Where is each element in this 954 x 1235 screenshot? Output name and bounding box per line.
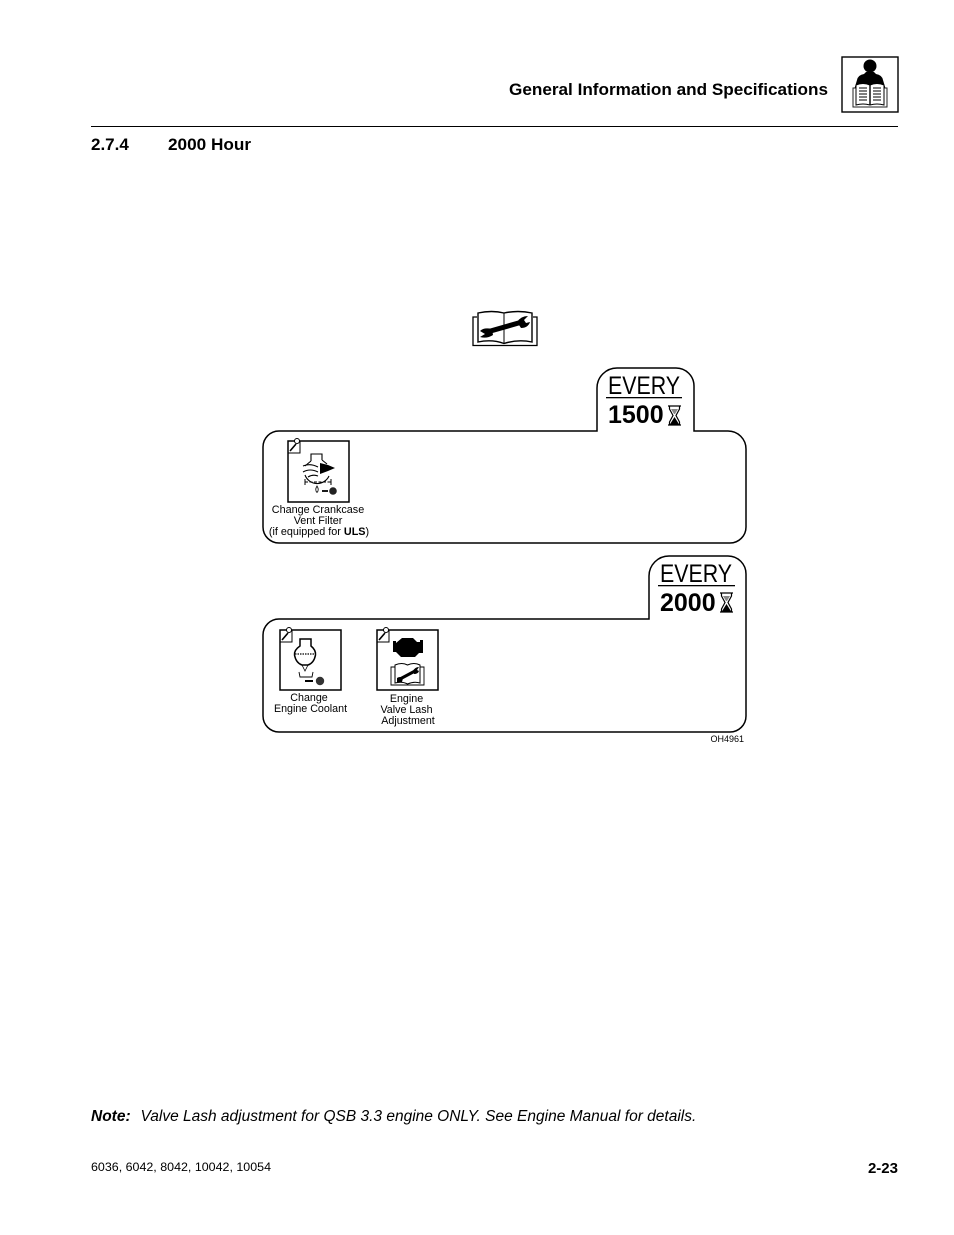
task caption: Change [290, 692, 328, 704]
task: change crankcase vent filter [269, 438, 369, 538]
section heading: 2.7.4 [91, 135, 129, 154]
tab label: 1500: 1500 [608, 401, 664, 429]
icon: coolant drain [280, 628, 341, 690]
task caption: Adjustment [381, 715, 435, 727]
icon: hourglass [720, 593, 733, 612]
figure reference: OH4961 [710, 734, 744, 744]
footer model numbers: 6036, 6042, 8042, 10042, 10054 [91, 1160, 271, 1174]
icon: engine and manual [377, 628, 438, 690]
page number: 2-23 [868, 1160, 898, 1177]
tab rule [606, 397, 682, 398]
icon: service manual with wrench [473, 312, 537, 346]
note: Note: [91, 1108, 131, 1125]
icon: person reading manual [842, 57, 898, 112]
header rule [91, 126, 898, 127]
task caption: Engine [390, 693, 423, 705]
section heading: 2000 Hour [168, 135, 251, 154]
section heading [91, 135, 251, 154]
tab label: every: EVERY [660, 560, 732, 588]
panel outline with tab [263, 556, 746, 732]
icon: crankcase vent filter [288, 438, 349, 502]
panel outline with tab [263, 368, 746, 543]
task: engine valve lash adjustment [377, 628, 438, 727]
tab label: every: EVERY [608, 372, 680, 400]
icon: hourglass [668, 406, 681, 425]
task caption: (if equipped for ULS) [269, 526, 369, 538]
task: change engine coolant [274, 628, 347, 715]
tab label: 2000: 2000 [660, 589, 716, 617]
panel: every 1500 hours [263, 368, 746, 543]
task caption: Change Crankcase [272, 504, 364, 516]
panel: every 2000 hours [263, 556, 746, 732]
header title: General Information and Specifications [509, 80, 828, 99]
task caption: Vent Filter [294, 515, 343, 527]
tab rule [658, 585, 735, 586]
note: Valve Lash adjustment for QSB 3.3 engine ONLY. See Engine Manual for details. [140, 1108, 696, 1125]
task caption: Valve Lash [380, 704, 433, 716]
task caption: Engine Coolant [274, 703, 347, 715]
